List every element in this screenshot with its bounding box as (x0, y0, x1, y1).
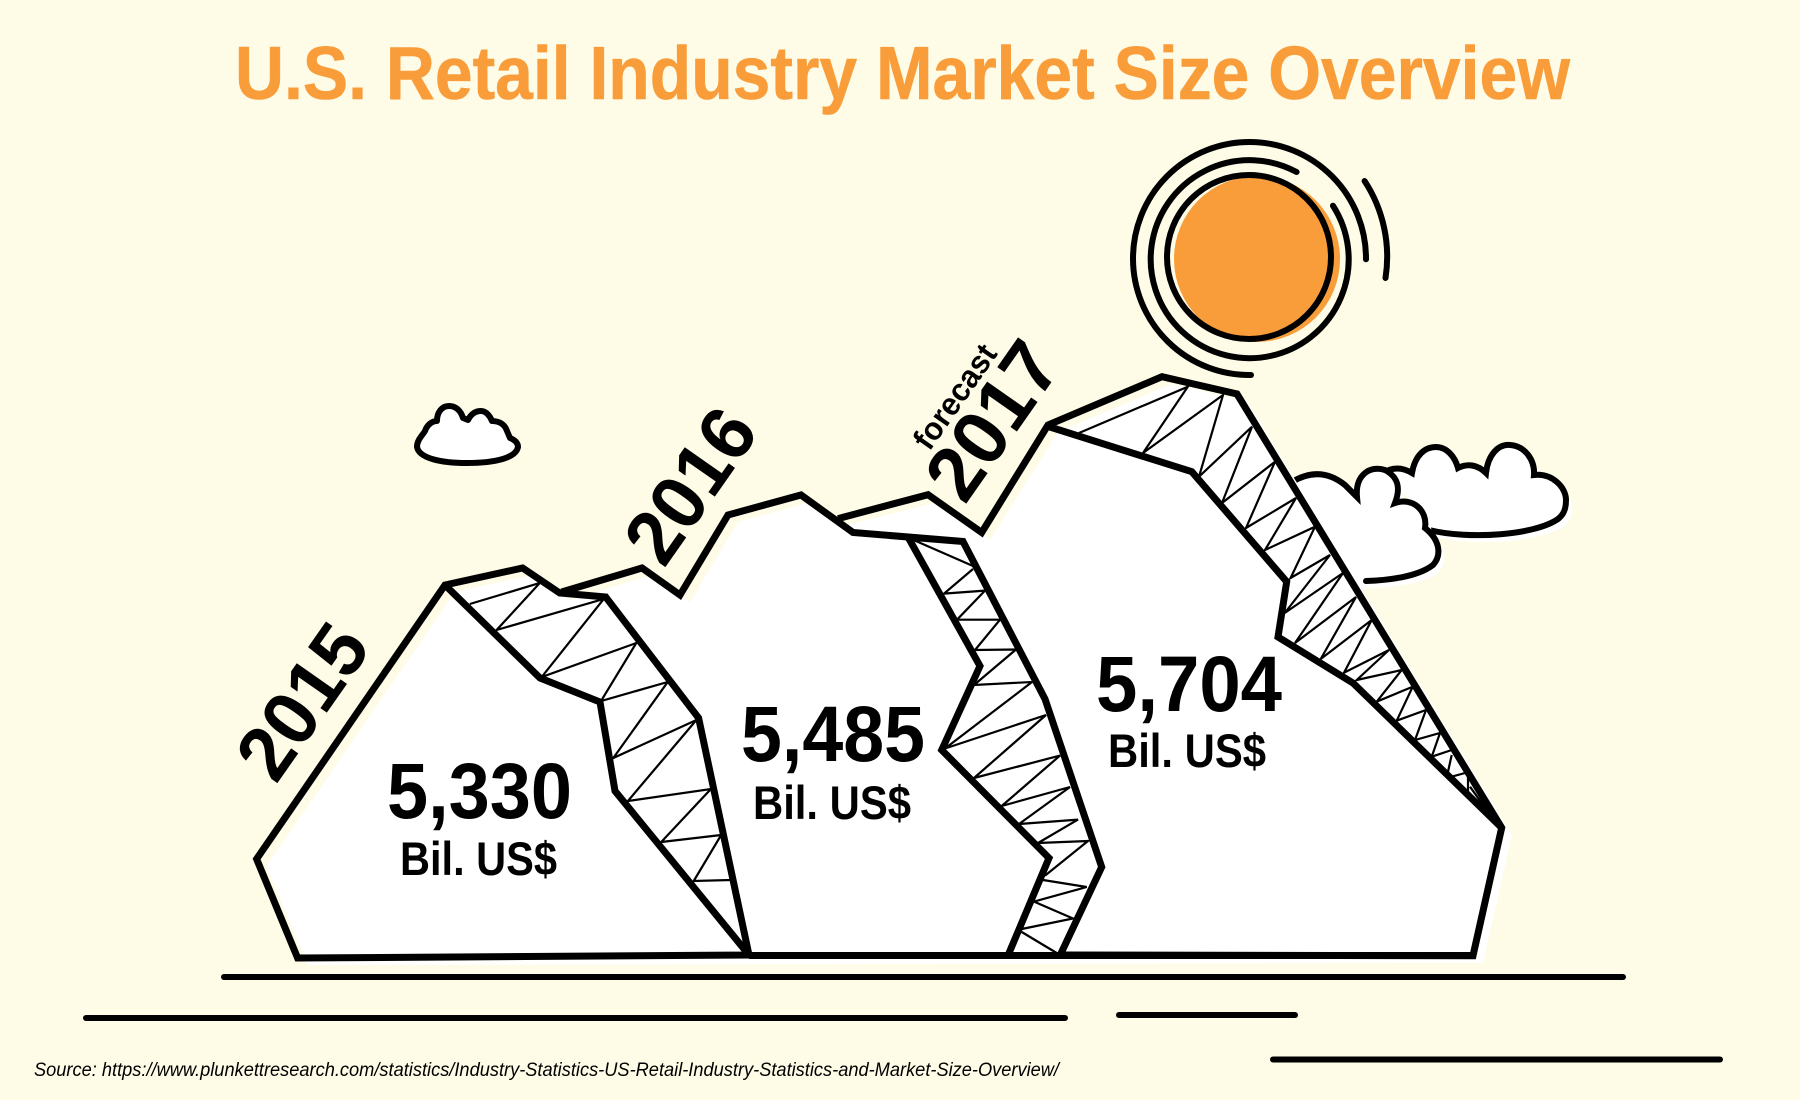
white mountain fill (267, 384, 1512, 965)
ridge lattice 2015 (470, 583, 731, 881)
mountain 2016 (562, 495, 1102, 956)
forecast label: forecast (906, 337, 1004, 456)
icon: sun (1133, 142, 1387, 375)
ground lines (86, 977, 1720, 1060)
icon: right clouds (1280, 445, 1572, 592)
cloud back right (1389, 445, 1572, 542)
title: U.S. Retail Industry Market Size Overview (235, 31, 1571, 115)
source: Source: https://www.plunkettresearch.com/statistics/Industry-Statistics-US-Retail-Industry-Statistics-and-Market-Size-Overview/ (34, 1060, 1061, 1081)
mountain 2015 (257, 568, 749, 958)
cloud front left (1280, 469, 1444, 592)
value 2016: 5,485 (741, 689, 925, 778)
ridge inner 2016 (908, 537, 1049, 956)
ridge inner 2015 (445, 585, 749, 955)
ridge lattice 2017 (1079, 387, 1487, 810)
value 2016: Bil. US$ (753, 776, 911, 829)
value 2017: Bil. US$ (1108, 724, 1266, 777)
value 2017 (1096, 639, 1282, 777)
ridge inner 2017 (1047, 426, 1502, 828)
ridge lattice 2016 (913, 540, 1088, 953)
mountain 2017 (838, 377, 1502, 956)
outline 2017 (838, 377, 1502, 956)
value 2015: 5,330 (387, 746, 572, 835)
year label 2015: 2015 (219, 608, 386, 795)
year label 2017: 2017 (908, 325, 1077, 516)
value 2015 (387, 746, 572, 885)
value 2016 (741, 689, 925, 829)
outline 2015 (257, 568, 749, 958)
year label 2016: 2016 (607, 392, 774, 579)
value 2015: Bil. US$ (400, 832, 557, 885)
base line (749, 952, 1473, 959)
icon: small cloud (417, 406, 518, 463)
value 2017: 5,704 (1096, 639, 1282, 728)
outline 2016 (562, 495, 1102, 956)
